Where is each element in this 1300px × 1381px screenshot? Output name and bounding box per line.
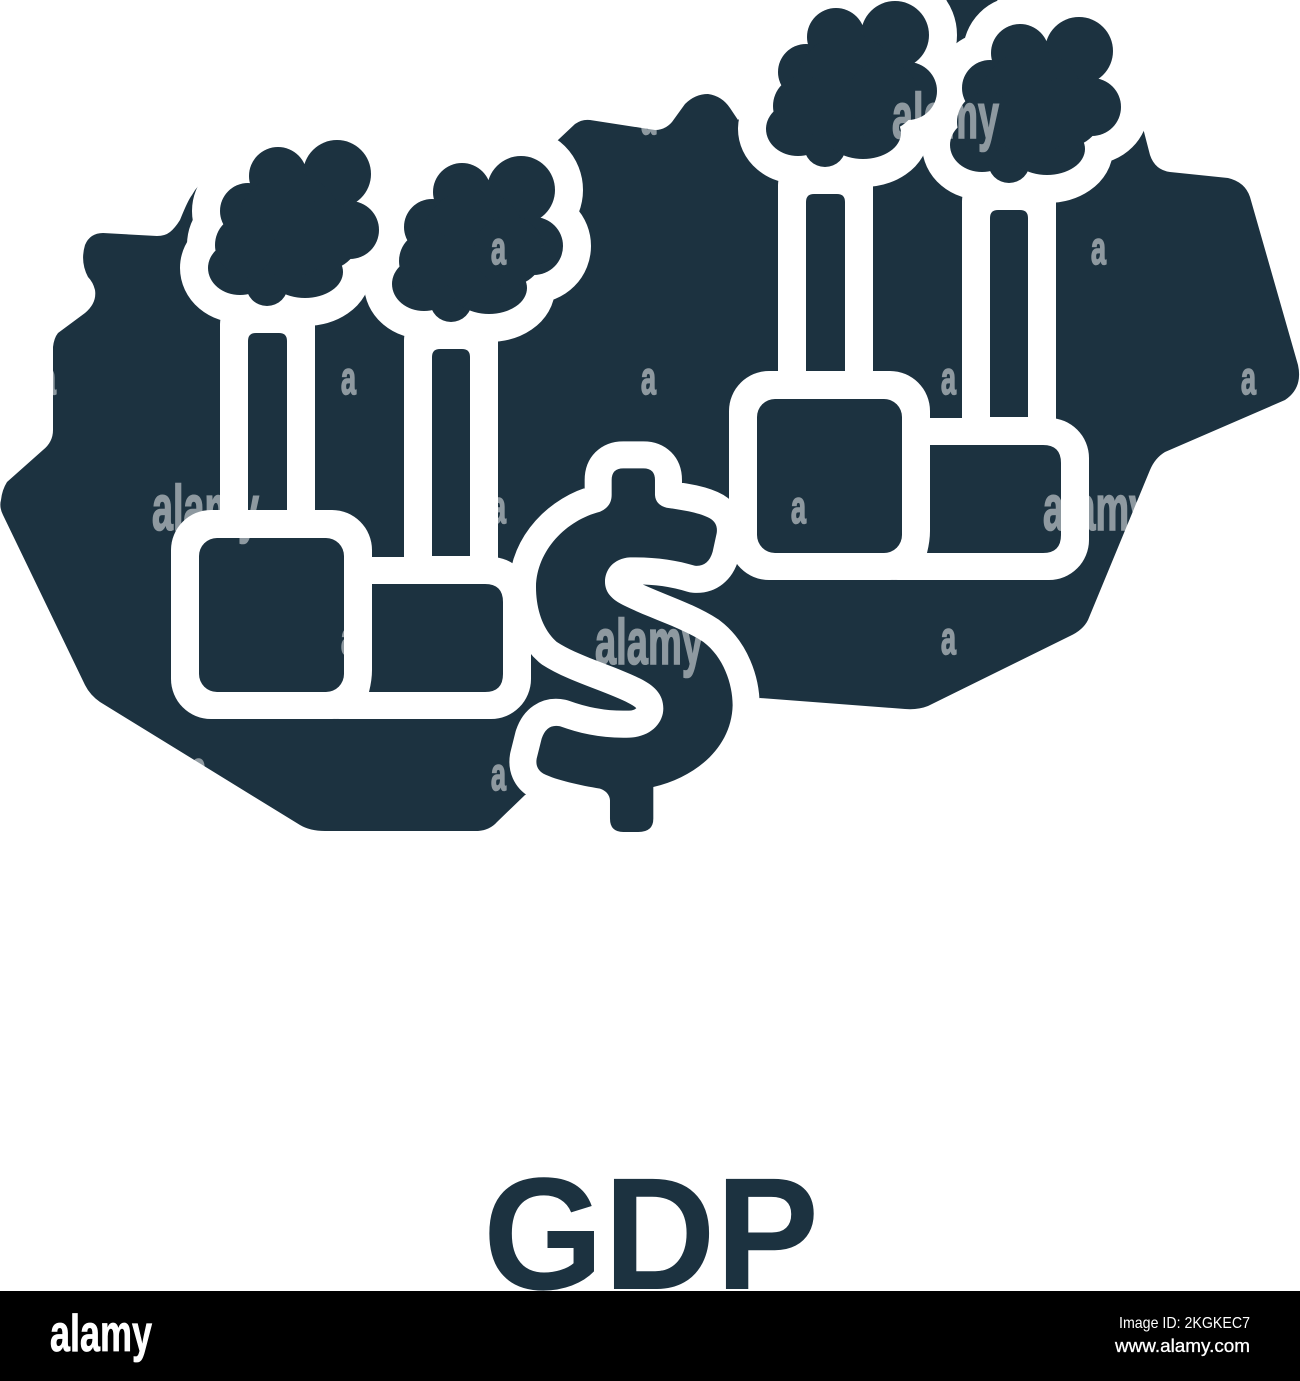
watermark pattern: a — [341, 612, 356, 664]
icon: dollar sign — [536, 468, 733, 832]
title: GDP: GDP — [483, 1144, 819, 1323]
watermark pattern: a — [491, 222, 506, 274]
watermark pattern: a — [191, 742, 206, 794]
watermark pattern: alamy — [892, 80, 999, 152]
watermark pattern: a — [1241, 352, 1256, 404]
watermark pattern: a — [341, 352, 356, 404]
watermark pattern: a — [641, 352, 656, 404]
icon: right factory with smoke — [729, 1, 1121, 580]
watermark pattern: a — [791, 481, 806, 533]
icon: left factory with smoke — [171, 140, 563, 719]
watermark pattern: a — [41, 352, 56, 404]
footer text: website: www.alamy.com — [1114, 1336, 1250, 1356]
watermark pattern: a — [641, 92, 656, 144]
watermark pattern: alamy — [152, 472, 259, 544]
watermark pattern: alamy — [595, 606, 703, 678]
footer text: image ID: Image ID: 2KGKEC7 — [1119, 1315, 1250, 1332]
footer logo: alamy: alamy — [50, 1305, 152, 1363]
map of country silhouette — [0, 0, 1299, 831]
watermark pattern — [41, 80, 1256, 800]
watermark pattern: a — [941, 612, 956, 664]
watermark pattern: a — [941, 352, 956, 404]
watermark pattern: a — [491, 481, 506, 533]
watermark pattern: alamy — [1043, 472, 1150, 544]
watermark pattern: a — [1091, 222, 1106, 274]
watermark pattern: a — [491, 748, 506, 800]
footer bar — [0, 1291, 1300, 1381]
